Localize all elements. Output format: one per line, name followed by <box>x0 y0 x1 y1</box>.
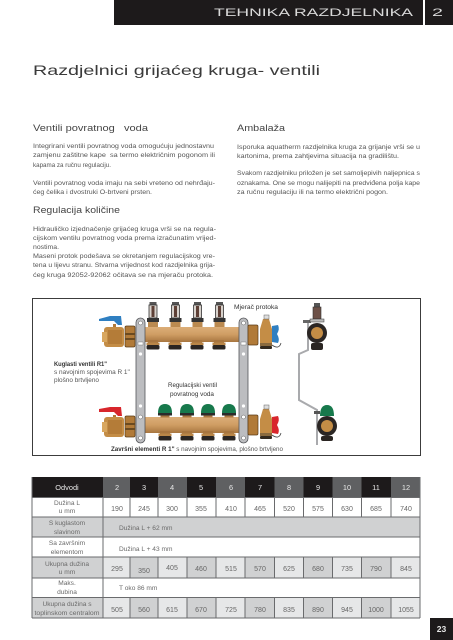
right end element: blue <box>248 315 281 349</box>
table: first column labels: Sa završnim <box>49 540 86 547</box>
left ball valve: red handle <box>99 407 135 437</box>
table: first column labels: Maks. <box>58 580 76 587</box>
table: first column labels: slavinom <box>54 529 81 536</box>
table: total length with central row: 505 <box>111 607 123 614</box>
green regulating valves <box>158 404 236 418</box>
table: header row: Odvodi <box>55 483 79 492</box>
table: total length row: 570 <box>254 566 266 573</box>
table: length row: 520 <box>283 506 295 513</box>
table: header row: 2 <box>115 483 119 492</box>
table: total length row <box>111 565 412 575</box>
table: length row: 190 <box>111 506 123 513</box>
table: total length row: 405 <box>166 565 178 572</box>
table: total length with central row: 780 <box>254 607 266 614</box>
table: first column labels <box>34 500 100 617</box>
text block: ventili: kapama za ručnu regulaciju. <box>33 162 111 169</box>
label: mjerač protoka: Mjerač protoka <box>234 304 279 311</box>
table <box>32 477 420 618</box>
top bar lower caps <box>146 340 226 350</box>
panel: manifold diagram <box>32 298 420 456</box>
table: total length with central row <box>111 607 414 614</box>
table: total length row: 680 <box>312 566 324 573</box>
text block: regulacija <box>33 226 216 279</box>
title: Razdjelnici grijaćeg kruga- ventili <box>33 62 320 78</box>
table: total length row: 845 <box>400 566 412 573</box>
manifold: top bar <box>143 327 248 342</box>
page number <box>430 618 453 640</box>
left ball valve: blue handle <box>99 316 135 347</box>
heading: Regulacija količine: Regulacija količine <box>33 205 120 215</box>
table: row fills <box>32 517 420 618</box>
text block: regulacija: nostima. <box>33 244 59 251</box>
chapter number box <box>425 0 453 25</box>
text block: regulacija: ćeg kruga 92052-92062 očitava se na mjeraču protoka. <box>33 272 213 279</box>
label: regulacijski ventil: povratnog voda <box>170 391 215 398</box>
header bar <box>114 0 423 25</box>
table: first column labels: u mm <box>59 508 76 515</box>
label: kuglasti ventili: plošno brtvljeno <box>54 377 100 384</box>
text block: ambalaža: Svakom razdjelniku priložen je set samoljepivih naljepnica s <box>237 170 421 177</box>
table: total length with central row: 670 <box>195 607 207 614</box>
page number: 23 <box>437 624 446 634</box>
table: header row: 6 <box>229 483 233 492</box>
table: total length with central row: 1055 <box>398 607 414 614</box>
text block: regulacija: Hidrauličko izjednačenje grijaćeg kruga vrši se na regula- <box>33 226 216 233</box>
table: header row: 10 <box>343 483 351 492</box>
table: length row: 300 <box>166 506 178 513</box>
table: length row: 740 <box>400 506 412 513</box>
text block: ventili: zamjenu zaštitne kape sa termo električnim pogonom ili <box>33 152 216 159</box>
table: total length with central row: 945 <box>341 607 353 614</box>
table: total length row: 735 <box>341 566 353 573</box>
table: total length row: 515 <box>225 566 237 573</box>
table: first column labels: Dužina L <box>54 500 80 507</box>
table: first column labels: dubina <box>57 589 77 596</box>
table: header row: 9 <box>316 483 320 492</box>
table: first column labels: elementom <box>51 549 84 556</box>
table: total length with central row: 835 <box>283 607 295 614</box>
table: spanning values: T oko 86 mm <box>119 585 158 592</box>
table: header row: 12 <box>402 483 410 492</box>
label: kuglasti ventili: Kuglasti ventili R1" <box>54 361 107 368</box>
text block: ambalaža: oznakama. One se mogu nalijepiti na predviđena polja kape <box>237 180 420 187</box>
table: first column labels: Ukupna dužina s <box>42 601 92 608</box>
mounting plates <box>136 318 248 443</box>
table: total length row: 350 <box>138 568 150 575</box>
bottom bar lower caps <box>158 431 236 440</box>
table: length row: 465 <box>254 506 266 513</box>
table: header row: 4 <box>170 483 174 492</box>
table: total length with central row: 725 <box>225 607 237 614</box>
table: length row: 575 <box>312 506 324 513</box>
table: spanning values <box>119 525 173 592</box>
table: header row <box>32 477 420 497</box>
manifold: bottom bar <box>143 417 248 433</box>
text block: ambalaža: za ručnu regulaciju ili na termo električni pogon. <box>237 189 388 196</box>
text block: regulacija: Maseni protok podešava se okretanjem regulacijskog vre- <box>33 253 215 260</box>
text block: ambalaža: Isporuka aquatherm razdjelnika kruga za grijanje vrši se u <box>237 144 420 151</box>
text block: regulacija: tena u lijevu stranu. Stvarna vrijednost kod razdjelnika grija- <box>33 262 215 269</box>
label: završni elementi: Završni elementi R 1" s navojnim spojevima, plošno brtvljeno <box>111 446 284 453</box>
section heading: TEHNIKA RAZDJELNIKA <box>214 7 414 19</box>
table: total length row: 460 <box>195 566 207 573</box>
table: first column labels: Ukupna dužina <box>45 561 89 568</box>
table: total length with central row: 560 <box>138 607 150 614</box>
label: regulacijski ventil: Regulacijski ventil <box>168 382 217 389</box>
table: header row: 11 <box>372 483 380 492</box>
table: total length row: 625 <box>283 566 295 573</box>
table: total length with central row: 1000 <box>368 607 384 614</box>
table: length row: 245 <box>138 506 150 513</box>
table: spanning values: Dužina L + 62 mm <box>119 525 173 532</box>
table: first column labels: u mm <box>59 569 76 576</box>
table: first column labels: toplinskom centralom <box>34 610 100 617</box>
table: header row: 5 <box>199 483 203 492</box>
table: header row: 7 <box>258 483 262 492</box>
table: total length with central row: 615 <box>166 607 178 614</box>
table: total length row: 790 <box>370 566 382 573</box>
text block: ventili: Ventili povratnog voda imaju na sebi vreteno od nehrđaju- <box>33 180 215 187</box>
heading: Ventili povratnog voda: Ventili povratnog voda <box>33 123 148 133</box>
text block: ambalaža: kartonima, prema zahtjevima situacija na gradilištu. <box>237 153 399 160</box>
right end element: red <box>248 405 281 439</box>
table: first column labels: S kuglastom <box>49 520 86 527</box>
text block: ambalaža <box>237 144 421 196</box>
label: kuglasti ventili <box>54 361 130 384</box>
table: length row: 630 <box>341 506 353 513</box>
table: length row <box>111 506 412 513</box>
table: header row: 8 <box>287 483 291 492</box>
heading: Ambalaža: Ambalaža <box>237 123 285 133</box>
text block: regulacija: cijskom ventilu povratnog voda prema izračunatim vrijed- <box>33 235 216 242</box>
table: length row: 685 <box>370 506 382 513</box>
table: length row: 355 <box>195 506 207 513</box>
table: total length row: 295 <box>111 566 123 573</box>
text block: ventili <box>33 143 216 196</box>
label: kuglasti ventili: s navojnim spojevima R 1'' <box>54 369 130 376</box>
table: header row: 3 <box>142 483 146 492</box>
table: spanning values: Dužina L + 43 mm <box>119 546 173 553</box>
text block: ventili: ćeg čelika i dvostruki O-brtveni prsten. <box>33 189 152 196</box>
chapter number box: 2 <box>432 7 443 19</box>
side view <box>299 303 337 445</box>
text block: ventili: Integrirani ventili povratnog voda omogućuju jednostavnu <box>33 143 214 150</box>
table: total length with central row: 890 <box>312 607 324 614</box>
table: length row: 410 <box>225 506 237 513</box>
flow meters <box>147 302 226 327</box>
label: regulacijski ventil <box>168 382 217 398</box>
